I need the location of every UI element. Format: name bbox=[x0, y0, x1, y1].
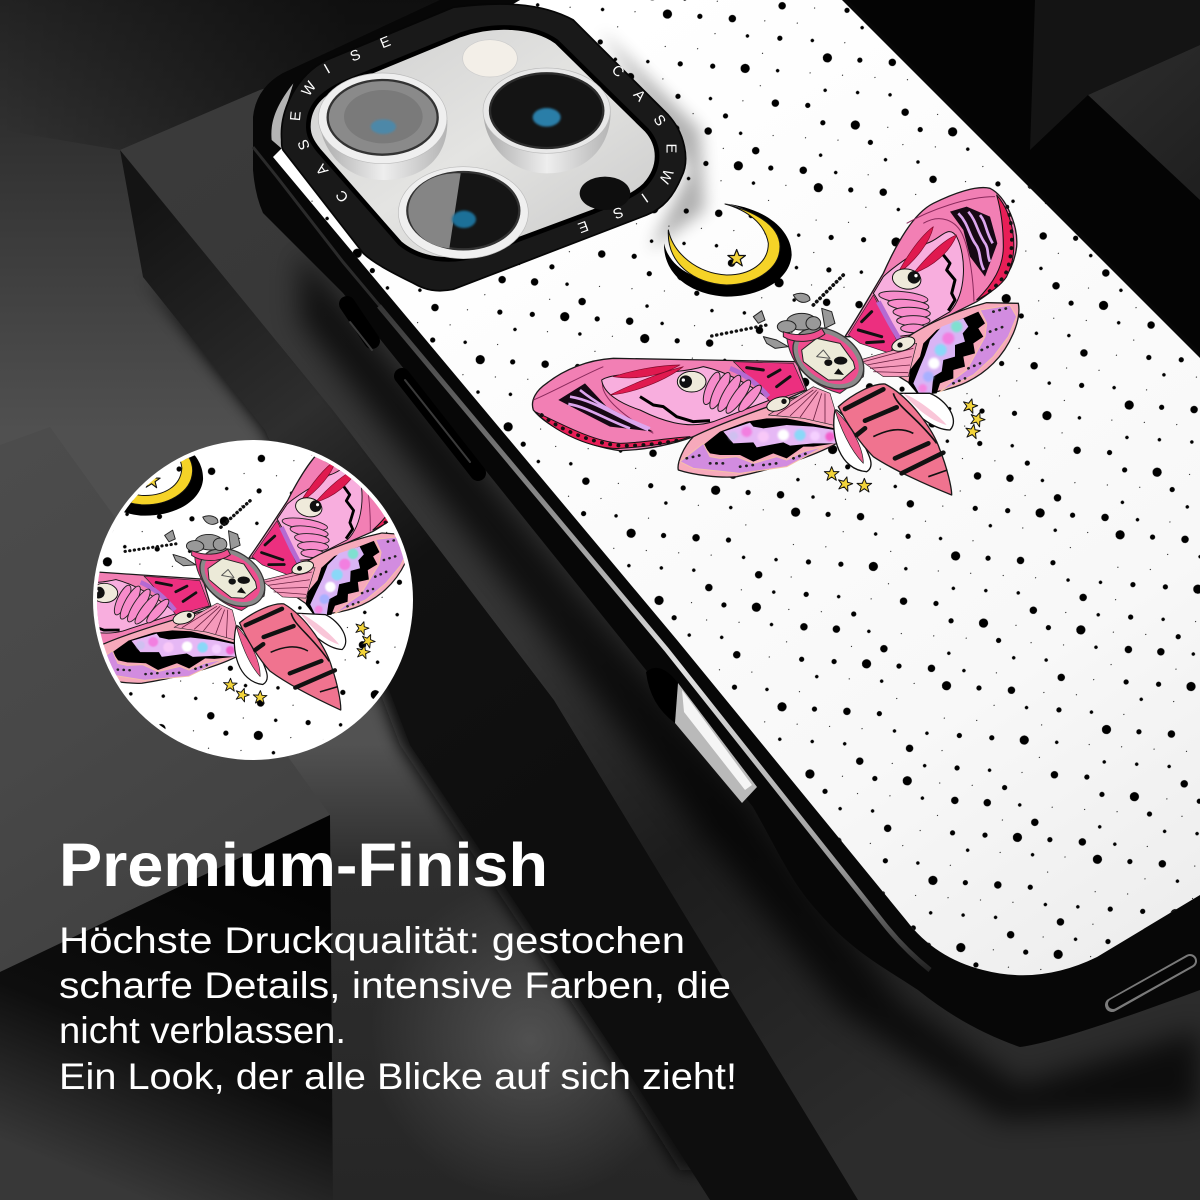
background: small block top face bbox=[0, 427, 330, 972]
background: floor glow bbox=[370, 880, 690, 1200]
circle white base bbox=[93, 440, 413, 760]
silver inner lip bbox=[379, 306, 930, 970]
CASEWISE ring lettering: S bbox=[295, 137, 314, 152]
case shadow bbox=[300, 250, 1200, 1120]
CASEWISE ring lettering: S bbox=[348, 47, 363, 65]
CASEWISE ring lettering: E bbox=[378, 34, 393, 52]
background: top-right block bbox=[1088, 45, 1200, 200]
small side button bbox=[347, 304, 372, 350]
main lens 1 bbox=[318, 73, 447, 180]
main lens 2 bbox=[483, 68, 611, 173]
dot pattern bbox=[300, 0, 1200, 975]
CASEWISE ring lettering: C bbox=[608, 62, 627, 81]
CASEWISE ring lettering: E bbox=[288, 110, 305, 122]
button highlight bbox=[682, 690, 752, 790]
silver side button bbox=[675, 683, 757, 803]
background: central block side face bbox=[120, 150, 858, 1200]
background: small block front face bbox=[0, 815, 333, 1200]
printed back panel bbox=[273, 0, 1200, 975]
CASEWISE ring lettering: W bbox=[299, 79, 320, 99]
body text: nicht verblassen. bbox=[59, 1010, 346, 1051]
lens 1 glass bbox=[328, 80, 438, 155]
circle artwork bbox=[97, 454, 405, 755]
lens 1 ring bbox=[318, 73, 447, 164]
moth and moon artwork on the case bbox=[532, 188, 1019, 495]
gray tape edge bbox=[271, 83, 293, 150]
case rim sheen bbox=[253, 147, 400, 330]
background: top fade bbox=[0, 0, 560, 150]
CASEWISE ring lettering: E bbox=[662, 143, 678, 153]
CASEWISE ring lettering: A bbox=[313, 160, 332, 178]
lens 3 glass reflection bbox=[408, 173, 461, 248]
charging port bbox=[1112, 961, 1190, 1005]
CASEWISE ring lettering bbox=[288, 34, 678, 235]
background: top-right wall bbox=[1030, 0, 1200, 150]
zoom circle callout bbox=[93, 440, 413, 760]
CASEWISE ring lettering: W bbox=[655, 166, 676, 186]
lens 2 glass bbox=[490, 73, 603, 148]
lidar sensor bbox=[580, 177, 630, 210]
CASEWISE ring lettering: I bbox=[322, 62, 333, 77]
camera shadow on back bbox=[600, 30, 705, 250]
body text: Ein Look, der alle Blicke auf sich zieht! bbox=[59, 1056, 737, 1097]
flash bbox=[463, 40, 517, 77]
circle moth bbox=[97, 455, 405, 711]
phone case body bbox=[253, 0, 1200, 1120]
lens 3 ring bbox=[398, 167, 528, 259]
case outer shell bbox=[253, 0, 1200, 1047]
lens 3 glass dark bbox=[407, 172, 519, 249]
lens 2 base bbox=[483, 112, 611, 173]
heading: Premium-Finish bbox=[59, 831, 548, 899]
circle dots bbox=[97, 444, 409, 756]
main lens 3 bbox=[398, 167, 528, 259]
button recess bbox=[646, 668, 678, 723]
body text: scharfe Details, intensive Farben, die bbox=[59, 965, 731, 1006]
CASEWISE ring lettering: I bbox=[638, 190, 650, 205]
camera outer ring bbox=[281, 4, 686, 291]
body text: Höchste Druckqualität: gestochen bbox=[59, 920, 685, 961]
CASEWISE ring lettering: A bbox=[630, 87, 648, 105]
action button bbox=[402, 376, 478, 473]
background: dark top-right area bbox=[500, 0, 1200, 420]
lens 2 ring bbox=[483, 68, 610, 153]
CASEWISE ring lettering: E bbox=[575, 217, 590, 235]
background: block soft shadow edge bbox=[143, 277, 750, 1170]
body text bbox=[59, 920, 737, 1097]
CASEWISE ring lettering: S bbox=[650, 112, 668, 130]
CASEWISE ring lettering: C bbox=[333, 186, 352, 205]
camera glass bbox=[308, 27, 657, 259]
camera module bbox=[271, 4, 686, 291]
CASEWISE ring lettering: S bbox=[610, 203, 625, 221]
lens 1 base bbox=[319, 118, 447, 180]
